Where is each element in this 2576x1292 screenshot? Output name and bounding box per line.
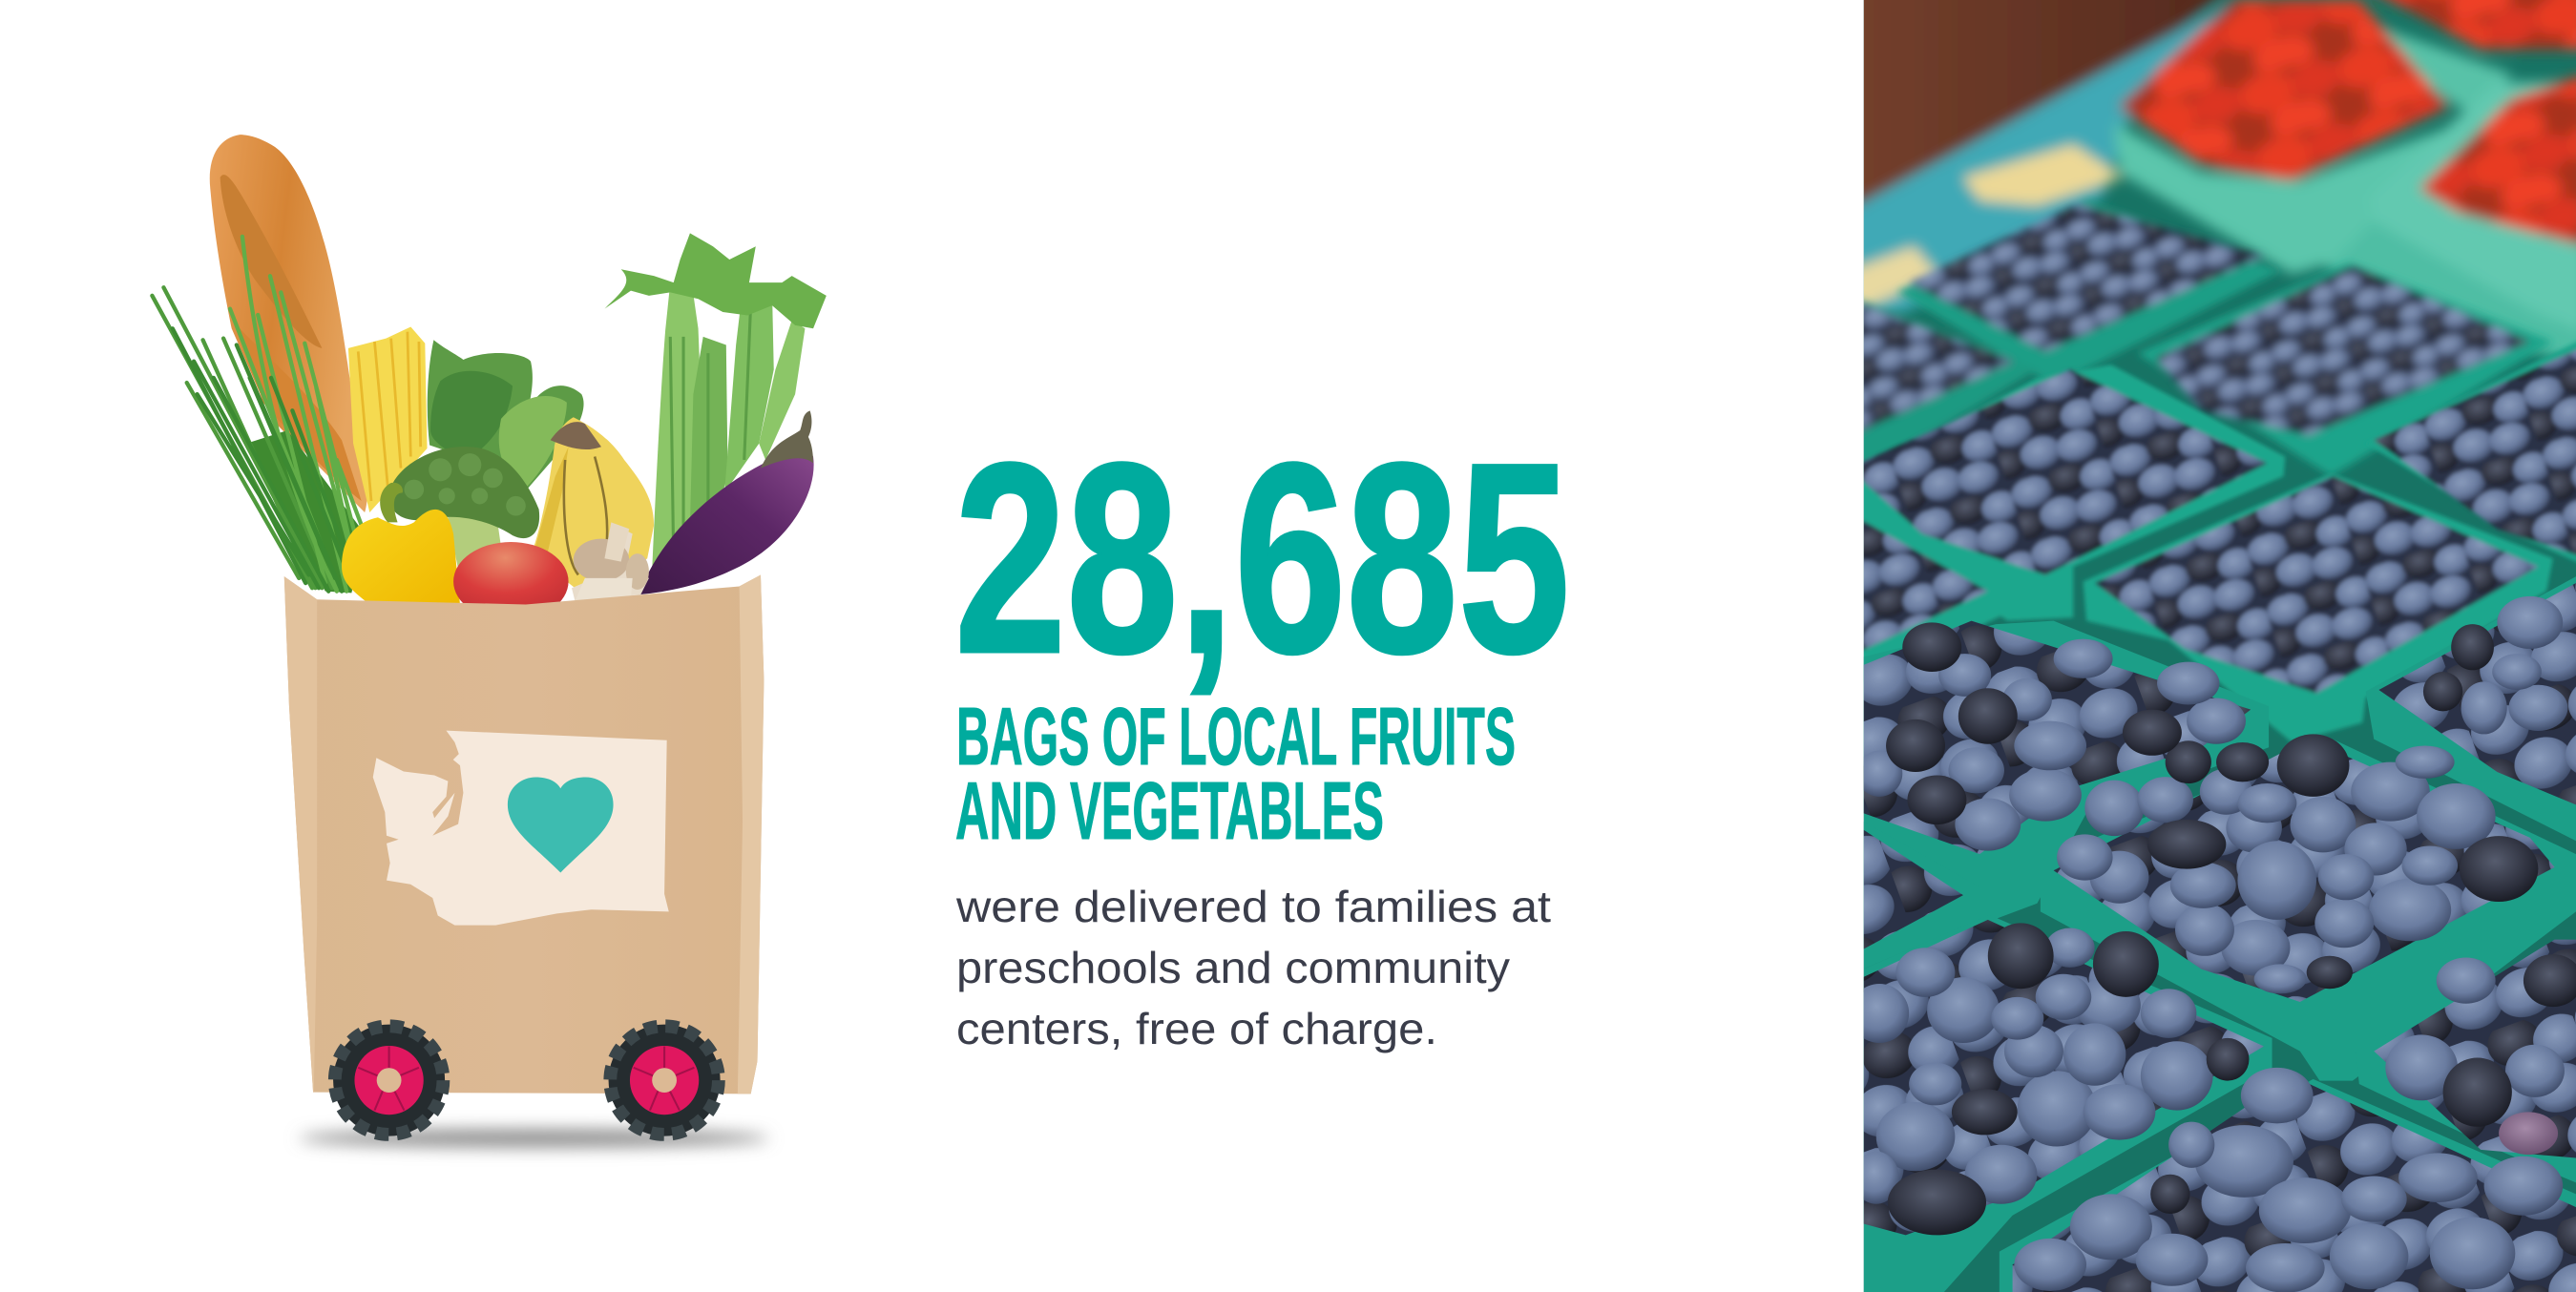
icon: teal heart xyxy=(508,778,614,873)
icon: mushrooms xyxy=(572,522,649,601)
far baskets xyxy=(1848,200,2553,485)
icon: eggplant xyxy=(639,410,814,594)
foreground blue berries xyxy=(1850,596,2567,1292)
grocery bag xyxy=(284,574,764,1094)
icon: celery xyxy=(604,233,827,567)
heading: BAGS OF LOCAL FRUITS xyxy=(956,692,1516,782)
icon: bananas xyxy=(532,417,654,589)
icon: broccoli xyxy=(389,447,539,578)
heading: AND VEGETABLES xyxy=(955,766,1384,857)
big number: 28,685 xyxy=(954,407,1570,710)
photo panel: blueberries and strawberries at market xyxy=(1848,0,2576,1292)
ground shadow xyxy=(299,1129,769,1147)
Washington state silhouette xyxy=(373,731,669,926)
illustration: grocery bag on wheels xyxy=(152,135,827,1147)
body text: preschools and community xyxy=(956,943,1510,992)
icon: lettuce xyxy=(428,340,584,490)
icon: right wheel xyxy=(609,1025,721,1136)
ripening pink berry xyxy=(2499,1112,2558,1155)
blurred background: wood, table, strawberries xyxy=(1848,0,2576,369)
icon: apple xyxy=(453,542,569,621)
foreground dark berries xyxy=(1886,622,2576,1235)
icon: left wheel xyxy=(333,1025,445,1136)
mid-depth baskets xyxy=(1848,337,2576,742)
icon: baguette xyxy=(210,135,367,512)
heading xyxy=(955,692,1516,857)
icon: spaghetti xyxy=(348,327,428,512)
body text xyxy=(955,882,1551,1053)
foreground basket rims xyxy=(1863,576,2576,1292)
berry beds xyxy=(1863,583,2576,1292)
icon: chives xyxy=(152,237,365,593)
body text: centers, free of charge. xyxy=(956,1004,1437,1053)
icon: yellow pepper xyxy=(342,483,460,604)
body text: were delivered to families at xyxy=(955,882,1551,931)
